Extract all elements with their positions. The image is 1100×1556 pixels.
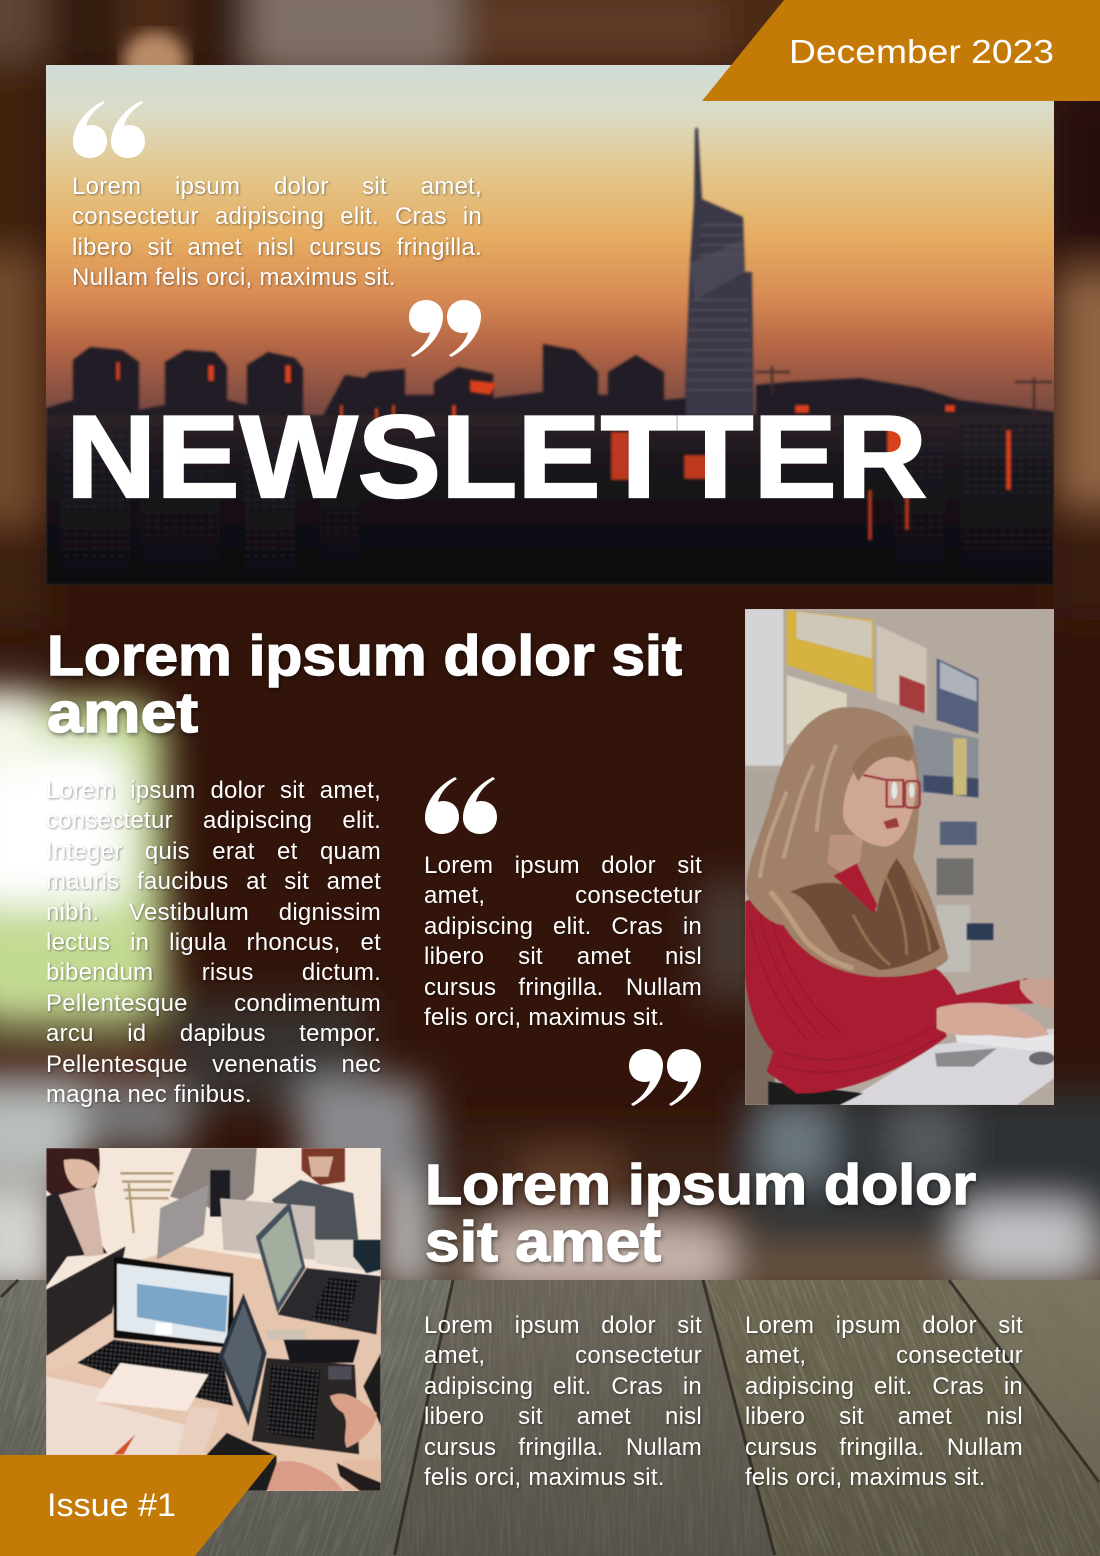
hero quote text: libero sit amet nisl cursus fringilla. xyxy=(72,234,482,261)
body text: first article: Integer quis erat et quam xyxy=(46,838,381,865)
body text: second article column one: felis orci, maximus sit. xyxy=(424,1464,665,1491)
title: NEWSLETTER xyxy=(66,391,927,520)
body text: first article: lectus in ligula rhoncus, et xyxy=(46,929,381,956)
body text: second article column one xyxy=(424,1312,703,1491)
heading: first article: amet xyxy=(47,681,198,745)
pull quote text: amet, consectetur xyxy=(424,882,702,909)
hero quote text: Nullam felis orci, maximus sit. xyxy=(72,264,396,291)
body text: second article column one: amet, consectetur xyxy=(424,1342,702,1369)
pull quote text: felis orci, maximus sit. xyxy=(424,1004,665,1031)
body text: second article column two: felis orci, maximus sit. xyxy=(745,1464,986,1491)
body text: second article column two: adipiscing elit. Cras in xyxy=(745,1373,1023,1400)
body text: first article: mauris faucibus at sit amet xyxy=(46,868,381,895)
pull quote text: cursus fringilla. Nullam xyxy=(424,974,702,1001)
body text: first article: Pellentesque condimentum xyxy=(46,990,381,1017)
body text: first article: consectetur adipiscing elit. xyxy=(46,807,381,834)
icon: opening quote (hero) xyxy=(73,101,480,356)
heading: second article xyxy=(425,1153,978,1274)
photo: woman in red sweater at a laptop xyxy=(745,609,1054,1105)
photo: team working on laptops xyxy=(46,1148,381,1491)
hero quote text xyxy=(72,173,482,291)
pull quote text: libero sit amet nisl xyxy=(424,943,702,970)
icon: closing quote (middle) xyxy=(629,1049,701,1106)
heading: second article: Lorem ipsum dolor xyxy=(425,1153,976,1217)
issue banner xyxy=(0,1455,276,1556)
heading: first article: Lorem ipsum dolor sit xyxy=(47,624,682,688)
body text: second article column two: amet, consectetur xyxy=(745,1342,1023,1369)
body text: second article column two: Lorem ipsum dolor sit xyxy=(745,1312,1023,1339)
hero quote text: consectetur adipiscing elit. Cras in xyxy=(72,203,482,230)
body text: first article: magna nec finibus. xyxy=(46,1081,252,1108)
icon: opening quote (middle) xyxy=(425,777,497,834)
body text: first article: Lorem ipsum dolor sit amet, xyxy=(46,777,381,804)
body text: second article column one: libero sit amet nisl xyxy=(424,1403,702,1430)
body text: first article: bibendum risus dictum. xyxy=(46,959,381,986)
hero photo: city skyline at sunset xyxy=(46,65,1054,585)
body text: first article: arcu id dapibus tempor. xyxy=(46,1020,381,1047)
body text: second article column one: adipiscing elit. Cras in xyxy=(424,1373,702,1400)
body text: first article: Pellentesque venenatis nec xyxy=(46,1051,381,1078)
body text: second article column one: Lorem ipsum dolor sit xyxy=(424,1312,702,1339)
body text: second article column one: cursus fringilla. Nullam xyxy=(424,1434,702,1461)
issue banner: Issue #1 xyxy=(47,1487,176,1523)
heading: second article: sit amet xyxy=(425,1210,661,1274)
body text: second article column two: libero sit amet nisl xyxy=(745,1403,1023,1430)
heading: first article xyxy=(46,624,684,745)
pull quote text: Lorem ipsum dolor sit xyxy=(424,852,702,879)
body text: second article column two: cursus fringilla. Nullam xyxy=(745,1434,1023,1461)
pull quote text: adipiscing elit. Cras in xyxy=(424,913,702,940)
body text: first article xyxy=(46,777,381,1109)
body text: second article column two xyxy=(745,1312,1024,1491)
body text: first article: nibh. Vestibulum dignissim xyxy=(46,899,381,926)
pull quote text xyxy=(424,852,702,1031)
floor planks xyxy=(0,1280,453,1556)
icon: closing quote (hero) xyxy=(409,300,481,357)
date banner: December 2023 xyxy=(789,33,1054,70)
date banner xyxy=(702,0,1100,101)
hero quote text: Lorem ipsum dolor sit amet, xyxy=(72,173,482,200)
